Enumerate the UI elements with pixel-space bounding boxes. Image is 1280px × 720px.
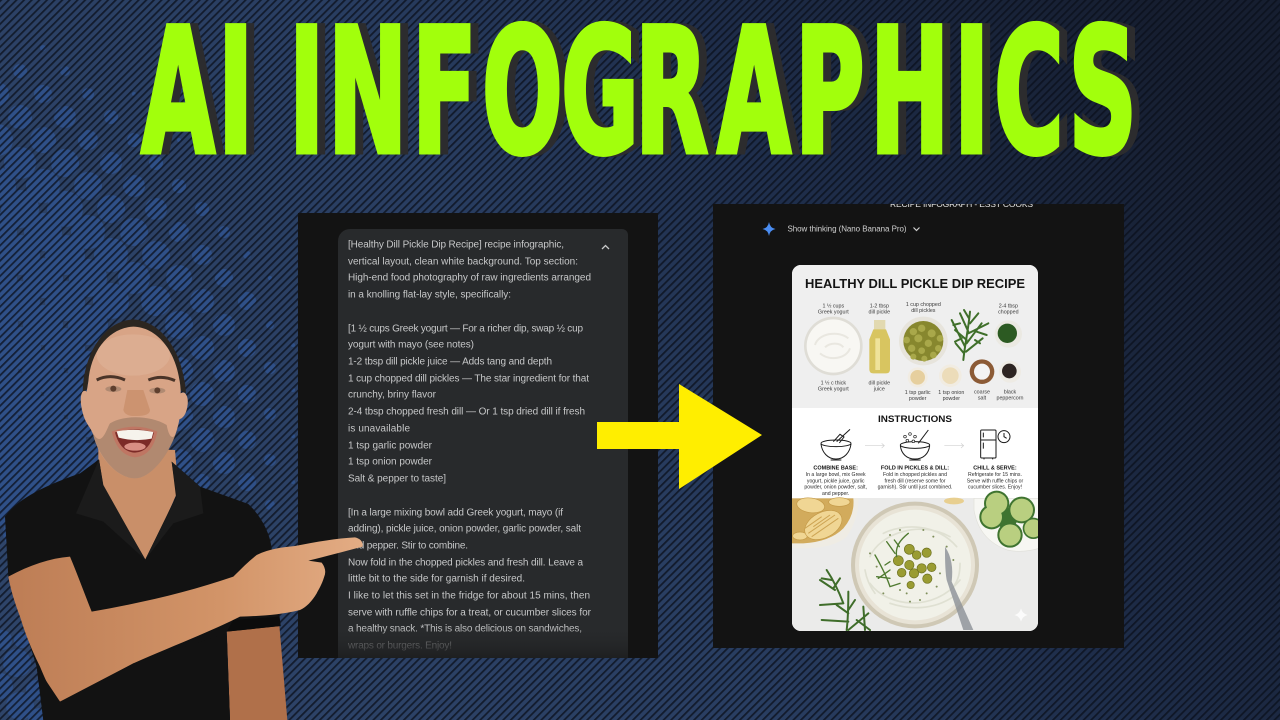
black pepper bowl [999, 361, 1021, 383]
prompt text: Salt & pepper to taste] [348, 474, 446, 484]
step 3 text: Refrigerate for 15 mins. [968, 472, 1022, 478]
prompt text: High-end food photography of raw ingredients arranged [348, 272, 591, 284]
ingredient labels: 1-2 tbsp [870, 303, 889, 309]
dill sprig bottom left [820, 570, 870, 630]
eyebrows [97, 377, 175, 381]
neck [98, 447, 178, 563]
step 1 text: In a large bowl, mix Greek [806, 472, 866, 478]
arrow step one [865, 443, 884, 448]
nose [123, 390, 150, 416]
ingredients and instructions [804, 276, 1025, 497]
loose chip [944, 498, 964, 504]
step 1 text: COMBINE BASE: [813, 466, 858, 472]
icon: fridge and clock [981, 430, 1010, 459]
infographic card [790, 265, 1044, 631]
step 3 text: CHILL & SERVE: [973, 466, 1017, 472]
coarse salt bowl [970, 359, 994, 384]
prompt text: 1 tsp onion powder [348, 456, 433, 468]
instructions heading: INSTRUCTIONS [878, 414, 952, 424]
cucumber bowl [974, 491, 1044, 551]
prompt text: I like to let this set in the fridge for about 15 mins, then [348, 590, 590, 602]
ingredient labels: coarse [974, 389, 990, 395]
prompt text: and pepper. Stir to combine. [348, 540, 468, 552]
card heading: HEALTHY DILL PICKLE DIP RECIPE [805, 276, 1025, 291]
show thinking label: Show thinking (Nano Banana Pro) [788, 224, 907, 234]
garlic powder bowl [908, 367, 928, 387]
forehead highlight [97, 334, 170, 376]
chevron [914, 228, 920, 230]
prompt text: [Healthy Dill Pickle Dip Recipe] recipe infographic, [348, 240, 564, 250]
step 2 text [878, 466, 952, 491]
prompt text: Now fold in the chopped pickles and fresh dill. Leave a [348, 558, 583, 568]
spoon [945, 547, 973, 630]
step 2 text: fresh dill (reserve some for [884, 478, 946, 484]
head [81, 319, 188, 478]
ingredient labels: peppercorn [997, 395, 1024, 401]
prompt text: yogurt with mayo (see notes) [348, 340, 474, 350]
ingredient labels: 1 ½ cups [823, 302, 844, 309]
prompt text: 1 cup chopped dill pickles — The star ingredient for that [348, 374, 589, 384]
ingredient labels: 1 tsp garlic [905, 390, 931, 396]
prompt text: 2-4 tbsp chopped fresh dill — Or 1 tsp dried dill if fresh [348, 406, 585, 418]
step 1 text: powder, onion powder, salt, [804, 485, 867, 491]
prompt text: wraps or burgers. Enjoy! [347, 640, 452, 652]
prompt text: in a knolling flat-lay style, specifically: [348, 290, 511, 300]
step 1 text: yogurt, pickle juice, garlic [807, 478, 865, 484]
collapse chevron [602, 246, 609, 249]
icon: bowl with pickles and spoon [900, 430, 930, 460]
prompt text: vertical layout, clean white background. Top section: [348, 256, 578, 268]
ingredient labels: salt [978, 395, 987, 401]
ingredient labels: dill pickle [869, 309, 890, 315]
pickle bowl [899, 317, 948, 365]
step 1 text [804, 466, 867, 497]
panel: prompt screenshot [298, 213, 658, 658]
prompt text: [In a large mixing bowl add Greek yogurt, mayo (if [348, 508, 563, 518]
dill pickle juice bottle [869, 320, 890, 373]
ingredient labels: powder [943, 396, 960, 402]
ingredient labels: dill pickles [911, 308, 936, 314]
prompt text: is unavailable [348, 424, 410, 434]
step 1 text: and pepper. [822, 491, 849, 497]
ingredient labels: 1 cup chopped [906, 302, 941, 308]
dip bowl [851, 502, 979, 628]
ingredient labels [818, 302, 1024, 402]
step 3 text: Serve with ruffle chips or [967, 478, 1023, 484]
chips bowl [792, 497, 854, 544]
fresh dill sprig [952, 310, 988, 360]
cut-off header: RECIPE INFOGRAPH - ESST COOKS [890, 199, 1033, 209]
ingredient labels: powder [909, 396, 927, 402]
ingredient labels: black [1004, 389, 1017, 395]
arrow [597, 384, 762, 489]
watermark sparkle [1015, 609, 1027, 621]
arrow step two [944, 443, 964, 448]
step 2 text: FOLD IN PICKLES & DILL: [881, 466, 949, 472]
prompt text: adding), pickle juice, onion powder, garlic powder, salt [348, 524, 581, 534]
lower shirt [37, 633, 230, 720]
prompt text: crunchy, briny flavor [348, 390, 437, 400]
ingredient labels: 1 ½ c thick [821, 379, 846, 386]
step 2 text: garnish). Stir until just combined. [878, 485, 952, 491]
presenter pointing [5, 319, 363, 720]
sleeve edge [227, 617, 281, 632]
collar [76, 459, 203, 559]
ingredient labels: chopped [998, 309, 1019, 315]
eyes [105, 386, 121, 392]
pointing arm [8, 537, 363, 702]
ingredient labels: Greek yogurt [818, 309, 849, 315]
prompt text: a healthy snack. *This is also delicious on sandwiches, [348, 624, 582, 634]
prompt text: [1 ½ cups Greek yogurt — For a richer dip, swap ½ cup [348, 324, 583, 334]
prompt text [347, 240, 592, 652]
chopped dill bowl [995, 320, 1022, 348]
step 3 text [967, 466, 1023, 491]
ingredient labels: juice [873, 386, 885, 392]
onion powder bowl [939, 364, 962, 387]
ingredient labels: dill pickle [869, 380, 890, 386]
ingredient labels: 1 tsp onion [938, 390, 964, 396]
mouth [112, 427, 157, 457]
panel: generated result screenshot [713, 199, 1124, 648]
icon: mixing bowl with whisk [821, 429, 851, 460]
ingredient labels: 2-4 tbsp [999, 303, 1018, 309]
step 3 text: cucumber slices. Enjoy! [968, 485, 1022, 491]
stubble [93, 417, 180, 478]
photo of finished dip [790, 491, 1044, 630]
far forearm [227, 625, 287, 720]
icon: blue sparkle [762, 222, 776, 236]
hair [83, 319, 186, 393]
dill garnish [875, 533, 908, 587]
prompt text: 1 tsp garlic powder [348, 440, 433, 452]
prompt text: little bit to the side for garnish if desired. [348, 574, 525, 584]
shirt [5, 459, 281, 720]
prompt text: serve with ruffle chips for a treat, or cucumber slices for [348, 608, 592, 618]
step 2 text: Fold in chopped pickles and [883, 472, 947, 478]
yogurt bowl [804, 317, 863, 375]
pickle garnish [893, 544, 936, 589]
face [81, 327, 188, 478]
ingredient labels: Greek yogurt [818, 386, 849, 392]
prompt text: 1-2 tbsp dill pickle juice — Adds tang and depth [348, 356, 552, 368]
